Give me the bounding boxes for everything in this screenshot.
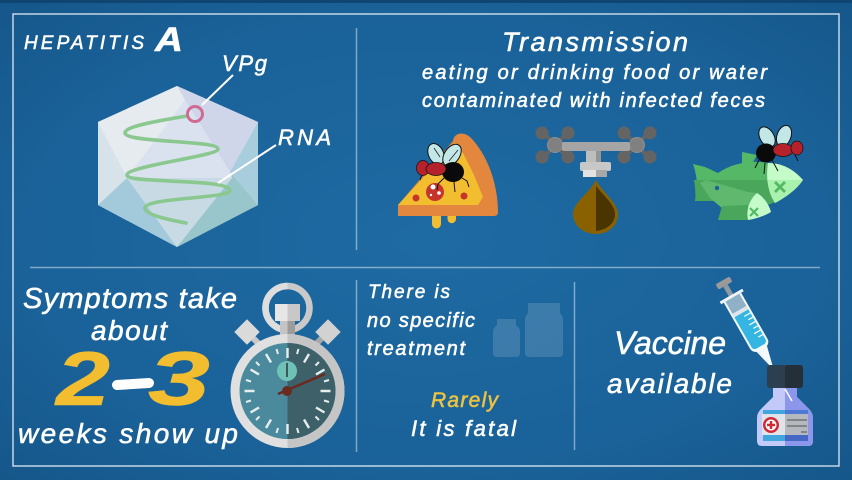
text block: vaccine available: available — [607, 368, 732, 399]
VPg label — [202, 51, 268, 105]
text block: transmission description: contaminated with infected feces — [422, 90, 765, 112]
title — [24, 21, 183, 59]
text block: vaccine available: Vaccine — [614, 325, 726, 361]
text block: symptoms take about — [23, 283, 237, 346]
number: 2-3 weeks: 2 — [53, 337, 110, 422]
icon: water tap — [536, 126, 656, 177]
icon: contaminated water drop — [573, 180, 618, 234]
text block: symptoms take about: Symptoms take — [23, 283, 237, 315]
icon: vaccine vial — [757, 365, 813, 446]
icon: syringe — [711, 274, 783, 373]
text block: transmission description: eating or drinking food or water — [422, 62, 768, 84]
title: HEPATITIS — [24, 33, 144, 54]
text block: rarely: Rarely — [431, 389, 500, 412]
icon: pizza — [398, 134, 498, 228]
RNA label: RNA — [278, 125, 331, 150]
text block: no specific treatment — [367, 282, 475, 360]
icon: VPg marker — [188, 106, 202, 122]
text block: weeks show up: weeks show up — [18, 418, 238, 449]
text block: no specific treatment: no specific — [367, 310, 475, 332]
icon: fly on fish — [755, 123, 803, 174]
text block: symptoms take about: about — [91, 315, 168, 346]
text block: vaccine available — [607, 325, 732, 399]
panel: symptoms timing — [18, 283, 344, 449]
VPg label: VPg — [222, 51, 268, 76]
panel: vaccine — [607, 274, 813, 446]
icon: virus capsid — [98, 86, 258, 247]
text block: transmission description — [422, 62, 768, 112]
text block: it is fatal: It is fatal — [411, 416, 517, 441]
title: A — [154, 21, 183, 59]
text block: no specific treatment: treatment — [367, 338, 466, 360]
number: 2-3 weeks: 3 — [148, 337, 210, 422]
heading: Transmission — [502, 27, 688, 57]
number: 2-3 weeks — [53, 337, 210, 422]
panel: hepatitis A virus — [24, 21, 331, 247]
icon: RNA strand — [125, 116, 230, 223]
text block: no specific treatment: There is — [368, 282, 450, 303]
icon: fly on pizza — [416, 141, 469, 192]
panel: transmission — [398, 27, 803, 234]
icon: stopwatch — [230, 286, 344, 448]
icon: faint medicine bottles — [493, 303, 563, 357]
panel: treatment — [367, 282, 563, 441]
icon: fish — [693, 152, 803, 220]
RNA label — [218, 125, 331, 183]
